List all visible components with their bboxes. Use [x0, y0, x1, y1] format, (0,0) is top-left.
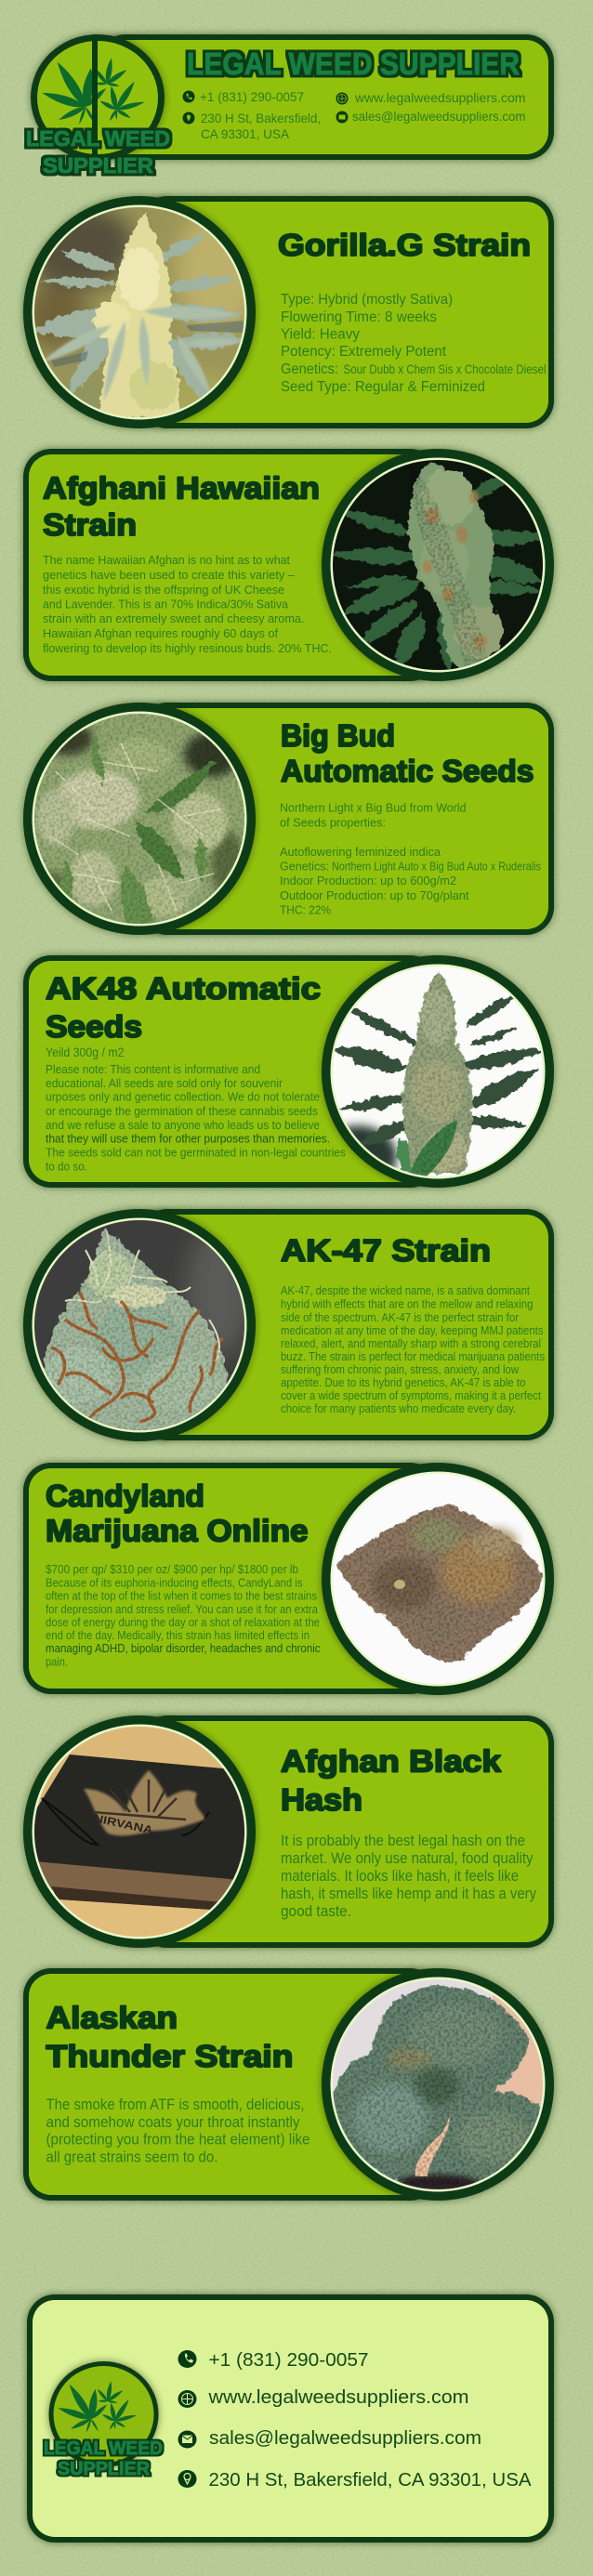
description: Indoor Production: up to 600g/m2: [280, 874, 456, 887]
description: AK-47, despite the wicked name, is a sativa dominant: [281, 1284, 530, 1297]
heading: AK-47 Strain: [281, 1233, 491, 1268]
yield: Yeild 300g / m2: [46, 1045, 125, 1059]
heading: [46, 1479, 309, 1548]
heading: AK48 Automatic: [46, 971, 321, 1005]
description: suffering from chronic pain, stress, anxiety, and low: [281, 1363, 520, 1376]
description: dose of energy during the day or a shot of relaxation at the: [46, 1616, 320, 1629]
description: medication at any time of the day, keeping MMJ patients: [281, 1324, 543, 1337]
icon: phone: [178, 2350, 197, 2368]
description: buzz. The strain is perfect for medical marijuana patients: [281, 1350, 545, 1363]
phone number: +1 (831) 290-0057: [208, 2350, 368, 2371]
description: Northern Light Auto x Big Bud Auto x Ruderalis: [332, 861, 541, 874]
description: choice for many patients who medicate every day.: [281, 1402, 516, 1415]
legal note: or encourage the germination of these cannabis seeds: [46, 1104, 318, 1118]
heading: Gorilla.G Strain: [278, 228, 531, 262]
photo: hash block: NIRVANA: [92, 1811, 154, 1837]
panel: Alaskan Thunder Strain: [23, 1968, 554, 2201]
heading: Candyland: [46, 1479, 204, 1513]
icon: location: [178, 2470, 197, 2488]
logo: footer: SUPPLIER: [58, 2459, 151, 2479]
description: flowering to develop its highly resinous buds. 20% THC.: [43, 641, 332, 655]
legal note: that they will use them for other purposes than memories.: [46, 1132, 330, 1146]
strain details: Genetics:: [281, 361, 338, 377]
heading: Automatic Seeds: [281, 754, 534, 788]
description: hybrid with effects that are on the mellow and relaxing: [281, 1297, 534, 1310]
description: Northern Light x Big Bud from World: [280, 801, 467, 814]
heading: [281, 1744, 502, 1817]
logo: footer: [44, 2361, 163, 2479]
description: [43, 553, 332, 655]
description: strain with an extremely sweet and cheesy aroma.: [43, 611, 305, 625]
description: Hawaiian Afghan requires roughly 60 days of: [43, 626, 278, 640]
description: and Lavender. This is an 70% Indica/30% Sativa: [43, 597, 289, 611]
legal note: to do so.: [46, 1159, 87, 1173]
address: CA 93301, USA: [201, 126, 290, 141]
logo: header: LEGAL WEED: [26, 126, 170, 151]
icon: phone: [182, 91, 195, 102]
description: end of the day. Medically, this strain has limited effects in: [46, 1629, 310, 1642]
description: good taste.: [281, 1903, 351, 1920]
icon: mail: [336, 112, 348, 123]
description: market. We only use natural, food quality: [281, 1850, 534, 1867]
description: hash, it smells like hemp and it has a very: [281, 1886, 537, 1902]
heading: Afghan Black: [281, 1744, 502, 1779]
strain details: Sour Dubb x Chem Sis x Chocolate Diesel: [344, 361, 547, 376]
description: Autoflowering feminized indica: [280, 845, 441, 859]
description: $700 per qp/ $310 per oz/ $900 per hp/ $1800 per lb: [46, 1563, 298, 1576]
heading: Seeds: [46, 1009, 142, 1044]
heading: company name: LEGAL WEED SUPPLIER: [187, 46, 520, 81]
legal note: [46, 1062, 346, 1173]
panel: footer contact card: [27, 2294, 554, 2543]
heading: Alaskan: [46, 2001, 178, 2035]
icon: globe: [178, 2390, 197, 2408]
description: Outdoor Production: up to 70g/plant: [280, 888, 469, 902]
description: The name Hawaiian Afghan is no hint as to what: [43, 553, 290, 567]
description: managing ADHD, bipolar disorder, headaches and chronic: [46, 1642, 320, 1655]
description: Because of its euphoria-inducing effects, CandyLand is: [46, 1577, 303, 1590]
panel: AK48 Automatic Seeds: [23, 955, 554, 1189]
address: [201, 111, 321, 141]
photo: Gorilla bud: [23, 196, 260, 428]
description: cover a wide spectrum of symptoms, making it a perfect: [281, 1389, 541, 1402]
panel: AK-47 Strain: [23, 1209, 554, 1441]
logo: footer: LEGAL WEED: [44, 2438, 163, 2459]
heading: [46, 2001, 294, 2073]
description: often at the top of the list when it comes to the best strains: [46, 1590, 317, 1603]
description: (protecting you from the heat element) like: [46, 2132, 310, 2149]
photo: Big Bud: [23, 703, 256, 935]
address: 230 H St, Bakersfield,: [201, 111, 321, 125]
heading: Strain: [43, 507, 137, 542]
description: of Seeds properties:: [280, 816, 386, 829]
photo: Candyland bud: [322, 1463, 554, 1695]
logo: header: [26, 34, 170, 177]
description: [281, 1833, 537, 1920]
description: [280, 801, 541, 916]
panel: header contact card: [98, 34, 554, 160]
legal note: Please note: This content is informative and: [46, 1062, 260, 1076]
description: this exotic hybrid is the offspring of UK Cheese: [43, 583, 284, 597]
heading: Afghani Hawaiian: [43, 470, 320, 506]
description: and somehow coats your throat instantly: [46, 2114, 300, 2131]
heading: Big Bud: [281, 718, 395, 753]
strain details: Flowering Time: 8 weeks: [281, 309, 437, 325]
icon: globe: [336, 93, 348, 104]
description: relaxed, alert, and mentally sharp with a strong cerebral: [281, 1337, 541, 1350]
description: It is probably the best legal hash on the: [281, 1833, 525, 1849]
logo: header: SUPPLIER: [43, 153, 153, 177]
strain details: [281, 292, 547, 395]
panel: Afghan Black Hash: [23, 1715, 554, 1948]
description: [281, 1284, 545, 1415]
website: www.legalweedsuppliers.com: [207, 2387, 468, 2408]
description: materials. It looks like hash, it feels like: [281, 1868, 519, 1885]
strain details: Type: Hybrid (mostly Sativa): [281, 292, 453, 308]
email: sales@legalweedsuppliers.com: [209, 2428, 481, 2449]
strain details: Yield: Heavy: [281, 327, 360, 342]
legal note: urposes only and genetic collection. We do not tolerate: [46, 1090, 320, 1104]
strain details: Potency: Extremely Potent: [281, 344, 447, 360]
description: for depression and stress relief. You can use it for an extra: [46, 1603, 318, 1616]
email: sales@legalweedsuppliers.com: [352, 109, 526, 124]
heading: Thunder Strain: [46, 2039, 294, 2073]
description: all great strains seem to do.: [46, 2149, 217, 2166]
description: appetite. Due to its hybrid genetics, AK-47 is able to: [281, 1376, 526, 1389]
legal note: and we refuse a sale to anyone who leads us to believe: [46, 1118, 320, 1132]
photo: Afghani bud: [322, 449, 554, 681]
legal note: educational. All seeds are sold only for souvenir: [46, 1076, 283, 1090]
description: genetics have been used to create this variety –: [43, 568, 296, 582]
photo: AK48 plant: [319, 955, 554, 1189]
panel: Candyland Marijuana Online: [23, 1463, 554, 1695]
panel: Big Bud Automatic Seeds: [23, 703, 554, 935]
photo: hash block: [23, 1715, 256, 1948]
description: side of the spectrum. AK-47 is the perfect strain for: [281, 1311, 519, 1324]
description: [46, 1563, 320, 1669]
description: pain.: [46, 1656, 68, 1669]
description: The smoke from ATF is smooth, delicious,: [46, 2096, 305, 2113]
heading: [46, 971, 321, 1044]
heading: Hash: [281, 1782, 362, 1817]
heading: [43, 470, 320, 542]
description: [46, 2096, 310, 2166]
heading: [281, 718, 534, 788]
description: Genetics:: [280, 859, 329, 874]
photo: AK-47 bud: [23, 1209, 256, 1441]
icon: mail: [178, 2431, 197, 2448]
heading: Marijuana Online: [46, 1514, 309, 1548]
description: THC: 22%: [280, 903, 331, 916]
strain details: Seed Type: Regular & Feminized: [281, 379, 485, 395]
panel: Afghani Hawaiian Strain: [23, 449, 554, 681]
photo: Alaskan bud: [322, 1968, 554, 2201]
icon: location: [182, 112, 195, 125]
legal note: The seeds sold can not be germinated in non-legal countries: [46, 1146, 346, 1160]
panel: Gorilla.G Strain: [23, 196, 554, 428]
phone number: +1 (831) 290-0057: [200, 89, 304, 104]
website: www.legalweedsuppliers.com: [354, 90, 526, 105]
address: 230 H St, Bakersfield, CA 93301, USA: [208, 2470, 532, 2491]
